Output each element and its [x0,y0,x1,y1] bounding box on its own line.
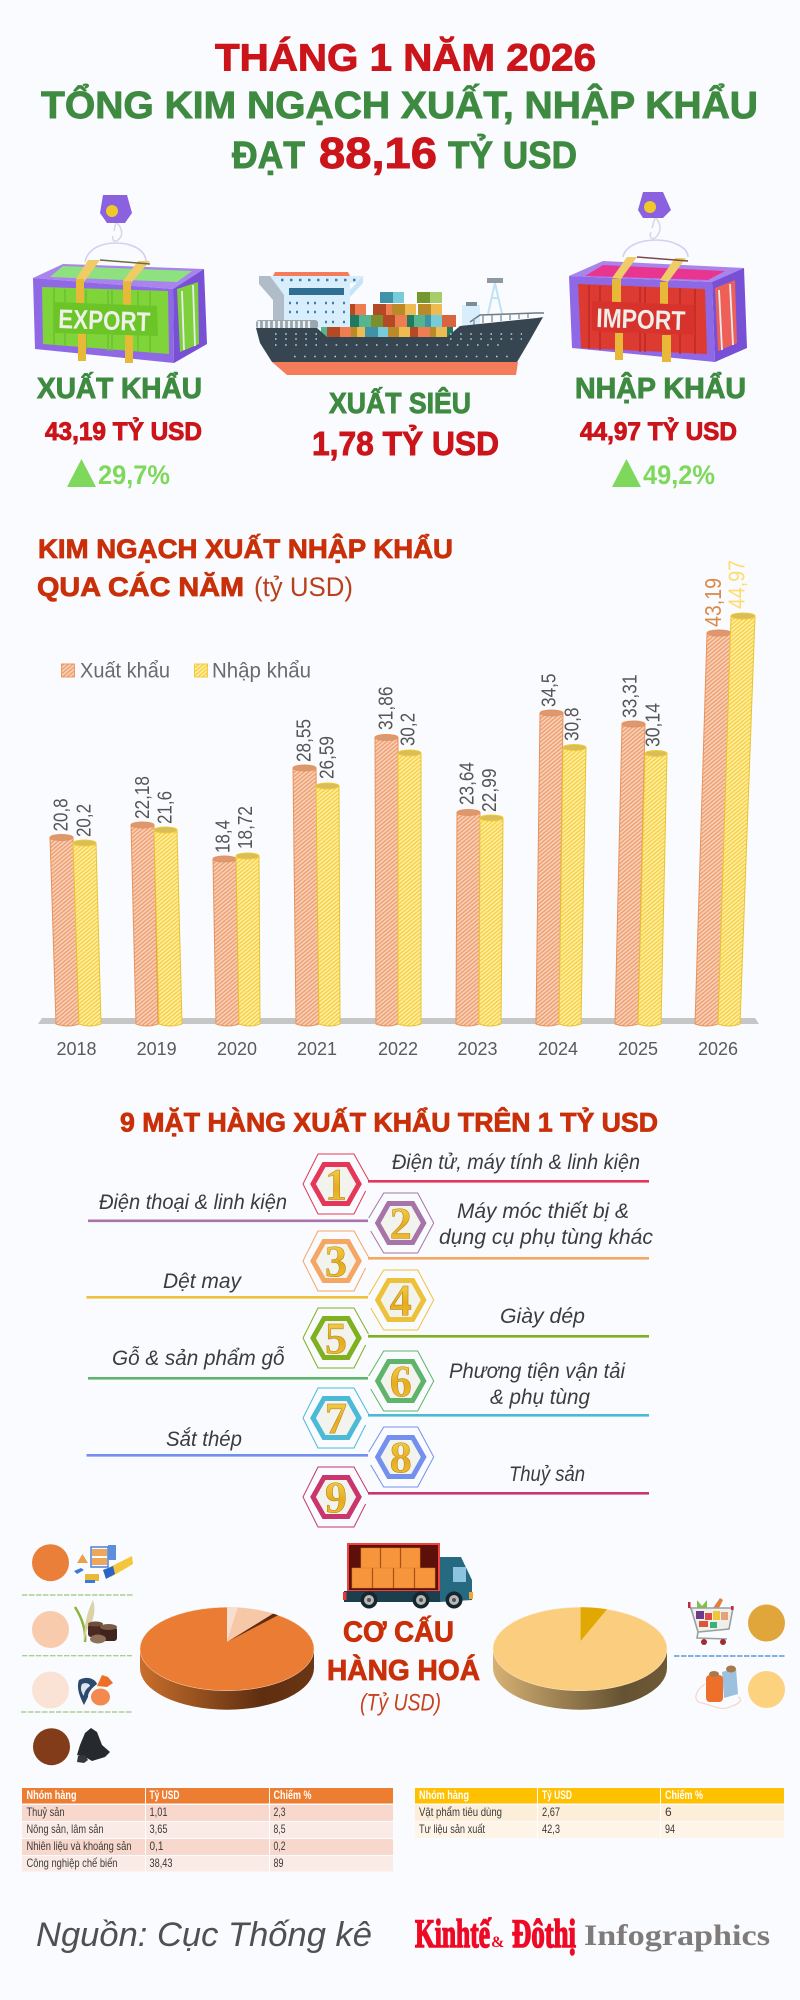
panel: import figures: 49,2% [643,460,715,490]
logo: Kinh te & Do thi Infographics: Đôthị [512,1911,576,1956]
bars 2026 [695,560,755,1059]
bars 2020: 2020 [217,1038,257,1059]
item 8: Thuỷ sản [509,1462,585,1486]
table: import structure [415,1788,784,1838]
panel: trade surplus: XUẤT SIÊU [329,386,471,420]
bars 2021: 2021 [297,1038,337,1059]
table: export structure: Nhiên liệu và khoáng sản [26,1839,132,1853]
panel: export figures: XUẤT KHẨU [37,371,202,405]
table: export structure [22,1788,393,1872]
table: import structure: 6 [665,1805,672,1819]
icon: import container: IMPORT [596,303,686,336]
icon: fish and shrimp [78,1675,113,1706]
item 4: 4 [390,1276,412,1325]
panel: trade surplus [312,386,499,462]
bars 2022: 30,2 [398,713,420,746]
table: export structure: 1,01 [150,1805,168,1819]
bars 2025: 33,31 [620,674,642,718]
bars 2023: 22,99 [479,768,501,812]
table: export structure: Tỷ USD [150,1790,180,1802]
heading: goods structure: (Tỷ USD) [360,1690,441,1717]
bars 2024: 2024 [538,1038,578,1059]
bars 2023: 23,64 [456,762,478,805]
item 4: Giày dép [500,1304,585,1328]
table: import structure: Tỷ USD [542,1790,572,1802]
table: import structure: Tư liệu sản xuất [419,1822,486,1836]
bars 2024: 30,8 [562,708,584,741]
pie chart: import structure [493,1607,667,1710]
item 1: Điện tử, máy tính & linh kiện [392,1150,640,1174]
bars 2021: 28,55 [294,719,316,762]
bars 2021: 26,59 [316,736,338,779]
table: export structure: 8,5 [274,1822,286,1836]
item 6: Phương tiện vận tải [449,1359,626,1383]
bars 2018 [50,798,101,1059]
bars 2024: 34,5 [538,674,560,707]
table: export structure: Thuỷ sản [26,1805,64,1819]
title [41,36,758,178]
table: export structure: 89 [274,1856,284,1870]
item 5 [112,1308,649,1370]
title: TỶ USD [448,133,577,177]
title: TỔNG KIM NGẠCH XUẤT, NHẬP KHẨU [41,82,758,127]
item 1 [303,1150,649,1214]
panel: export figures [37,371,202,490]
bars 2020: 18,72 [235,806,257,849]
table: export structure: Nhóm hàng [26,1790,76,1802]
bars 2026: 43,19 [700,578,726,627]
table: export structure: 2,3 [274,1805,286,1819]
bars 2023 [456,762,503,1059]
icon: rice and timber [75,1600,117,1644]
icon: thread spools [696,1666,740,1708]
item 3: Dệt may [163,1269,242,1293]
item 5: Gỗ & sản phẩm gỗ [112,1344,285,1370]
table: export structure: Nông sản, lâm sản [26,1822,104,1836]
bars 2022: 2022 [378,1038,418,1059]
table: import structure: 42,3 [542,1822,560,1836]
item 8: 8 [390,1433,412,1482]
item 3 [163,1231,649,1293]
title: ĐẠT [232,135,305,177]
panel: trade surplus: 1,78 TỶ USD [312,425,499,462]
item 9 [303,1467,649,1527]
item 3: 3 [325,1237,347,1286]
table: import structure: 2,67 [542,1805,560,1819]
legend [62,660,311,682]
bars 2021 [293,719,340,1059]
bars 2018: 20,8 [50,798,72,831]
item 2 [88,1190,653,1253]
heading: yearly chart: (tỷ USD) [254,572,353,602]
icon: export container: EXPORT [58,304,151,337]
bars 2020: 18,4 [212,820,234,853]
logo: Kinh te & Do thi Infographics: Kinhtế [415,1911,491,1956]
bars 2026: 44,97 [724,560,750,609]
icon: coal [77,1728,110,1763]
legend: Xuất khẩu [80,660,170,682]
panel: import figures [575,371,746,490]
item 8 [86,1427,585,1487]
bars 2019: 2019 [137,1038,177,1059]
icon: cargo ship [256,272,544,375]
panel: import figures: NHẬP KHẨU [575,371,746,405]
bars 2026: 2026 [698,1038,738,1059]
table: import structure: Nhóm hàng [419,1790,469,1802]
bars 2025: 30,14 [642,703,664,747]
bars 2020 [212,806,260,1059]
table: export structure: 0,2 [274,1839,286,1853]
icon: import container [569,192,747,362]
table: export structure: 3,65 [150,1822,168,1836]
table: import structure: 94 [665,1822,675,1836]
table: export structure: Công nghiệp chế biến [26,1856,118,1870]
item 6 [88,1351,626,1411]
item 6: 6 [390,1357,412,1406]
table: export structure: Chiếm % [274,1790,312,1802]
item 7: Sắt thép [166,1426,242,1451]
item 1: 1 [325,1160,347,1209]
bars 2022: 31,86 [376,686,398,730]
bars 2024 [536,674,586,1059]
list: nine export goods [86,1150,653,1527]
heading: yearly chart: QUA CÁC NĂM [37,571,244,602]
bars 2018: 2018 [56,1038,96,1059]
title: 88,16 [319,129,437,178]
item 4 [86,1270,585,1330]
table: import structure: Chiếm % [665,1790,703,1802]
title: THÁNG 1 NĂM 2026 [215,36,596,80]
item 2: Máy móc thiết bị & [457,1199,629,1223]
legend: export categories [21,1544,133,1765]
item 5: 5 [325,1314,347,1363]
bar chart: export and import by year [38,560,759,1059]
bars 2023: 2023 [458,1038,498,1059]
heading: nine export goods: 9 MẶT HÀNG XUẤT KHẨU TRÊN 1 TỶ USD [120,1106,658,1138]
heading: goods structure: HÀNG HOÁ [327,1653,480,1687]
icon: shopping cart [688,1598,734,1645]
logo: Kinh te & Do thi Infographics [415,1911,770,1956]
pie chart: export structure [140,1607,314,1710]
table: export structure: 0,1 [150,1839,164,1853]
legend: Nhập khẩu [212,660,311,682]
bars 2019 [131,776,182,1059]
item 2: dụng cụ phụ tùng khác [439,1225,653,1249]
logo: Kinh te & Do thi Infographics: & [491,1934,504,1951]
icon: export container [33,195,207,363]
panel: import figures: 44,97 TỶ USD [580,416,737,446]
bars 2018: 20,2 [74,804,96,837]
item 7: 7 [325,1394,347,1443]
legend: import categories [674,1598,786,1708]
item 2: 2 [390,1199,412,1248]
source: Nguồn: Cục Thống kê [36,1916,372,1954]
bars 2022 [375,686,421,1059]
item 9: 9 [325,1473,347,1522]
heading: goods structure [327,1615,480,1717]
bars 2025: 2025 [618,1038,658,1059]
bars 2019: 22,18 [132,776,154,819]
table: import structure: Vật phẩm tiêu dùng [419,1805,502,1819]
heading: yearly chart: KIM NGẠCH XUẤT NHẬP KHẨU [38,533,453,564]
item 2: Điện thoại & linh kiện [99,1190,287,1214]
icon: delivery truck [343,1544,473,1608]
panel: export figures: 29,7% [98,460,170,490]
bars 2025 [615,674,667,1059]
heading: goods structure: CƠ CẤU [343,1615,454,1649]
item 7 [166,1388,649,1451]
logo: Kinh te & Do thi Infographics: Infographics [584,1919,770,1952]
panel: export figures: 43,19 TỶ USD [45,416,202,446]
table: export structure: 38,43 [150,1856,173,1870]
heading: yearly chart [37,533,453,602]
item 6: & phụ tùng [490,1385,590,1409]
icon: warehouse and truck [74,1545,133,1583]
bars 2019: 21,6 [154,791,176,824]
